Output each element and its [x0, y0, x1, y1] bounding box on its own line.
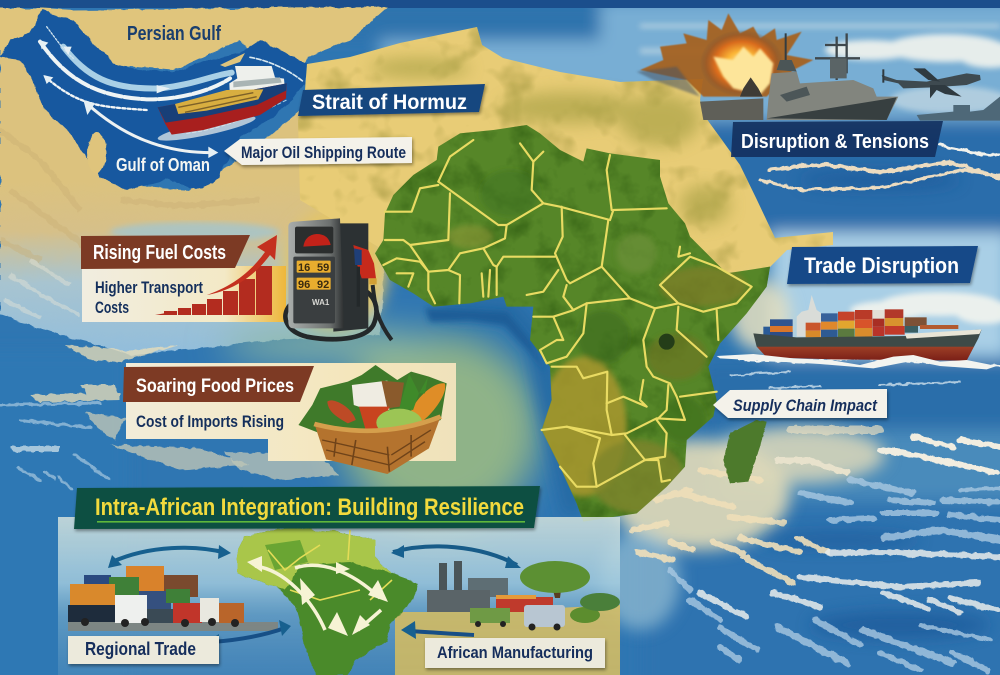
oil tanker: [156, 66, 287, 145]
mini africa map: [237, 525, 419, 675]
bow wave: [717, 354, 997, 369]
tanker deck cargo: [175, 89, 263, 114]
callout: supply chain impact: Supply Chain Impact: [733, 396, 878, 415]
callout: major oil shipping route: Major Oil Shipping Route: [241, 143, 406, 162]
container ship: [717, 295, 997, 369]
flow arrowheads: [247, 556, 388, 636]
pump display digits: 96: [298, 279, 310, 291]
tanker hull: [158, 83, 287, 135]
regional trade arrows: [108, 545, 521, 650]
pump display digits: 59: [317, 262, 329, 274]
persian gulf shipping routes: [39, 27, 303, 158]
trade flow arrows: [255, 565, 381, 630]
warship explosion and fleet: [637, 13, 1000, 121]
pump display digits: 16: [298, 262, 310, 274]
lake victoria: [659, 334, 675, 350]
route arrows: [39, 27, 303, 158]
madagascar: [723, 420, 767, 483]
icon: drone: [882, 68, 981, 98]
integration banner: Intra-African Integration: Building Resilience: [95, 494, 524, 521]
pale land and shallows west of Africa: [0, 305, 575, 525]
food heading: Soaring Food Prices: [136, 376, 294, 397]
factory and vehicles: [427, 561, 620, 630]
fuel header: [81, 235, 250, 269]
panel: intra-african integration: [58, 486, 620, 675]
country borders: [383, 140, 752, 487]
integration banner: [74, 486, 540, 529]
regional colour variation: [447, 170, 747, 513]
foam waves: [633, 145, 1000, 670]
olive patches on sand: [370, 58, 730, 225]
explosion: [637, 13, 813, 97]
food subtext: Cost of Imports Rising: [136, 412, 284, 431]
persian gulf water: [0, 10, 308, 190]
rising cost bar chart: [155, 266, 272, 315]
shipping containers and trucks: [68, 566, 244, 627]
ship hull: [753, 329, 982, 361]
rising arrow: [207, 235, 277, 295]
fuel subtext second line: Costs: [95, 298, 129, 317]
distant warship: [917, 97, 1000, 121]
label: gulf of oman: Gulf of Oman: [116, 155, 210, 175]
banner: disruption and tensions: [731, 121, 943, 157]
label: persian gulf: Persian Gulf: [127, 23, 221, 45]
africa landmass: [375, 125, 770, 522]
banner: trade disruption: [787, 246, 978, 284]
icon: fuel pump: [285, 218, 392, 340]
sand coast east of Africa: [600, 279, 885, 630]
sand land around the Persian Gulf: [0, 7, 420, 355]
sand land north-east of Africa: [298, 27, 833, 300]
food header: [123, 366, 314, 402]
integration ground: [395, 605, 620, 675]
callout: supply chain impact: [713, 389, 887, 418]
pump display digits: 92: [317, 279, 329, 291]
banner: strait of hormuz: Strait of Hormuz: [312, 91, 467, 114]
callout: major oil shipping route: [224, 137, 412, 165]
integration panel background: [58, 517, 620, 675]
fuel subtext: Higher Transport: [95, 278, 203, 297]
mid right waves: [777, 430, 1000, 473]
panel: rising fuel costs: [81, 235, 286, 322]
tanker superstructure: [229, 66, 285, 100]
banner: disruption and tensions: Disruption & Tensions: [741, 131, 929, 153]
icon: food basket: [298, 365, 447, 474]
main warship: [767, 33, 898, 120]
banner: trade disruption: Trade Disruption: [804, 253, 959, 278]
ship bridge: [797, 295, 822, 337]
label: african manufacturing: African Manufacturing: [437, 643, 593, 662]
trade yard ground: [68, 622, 278, 631]
pump display digits: [298, 262, 329, 291]
pump brand text: WA1: [312, 298, 330, 307]
lower right streaks: [633, 523, 827, 583]
label: regional trade: Regional Trade: [85, 639, 196, 659]
fuel heading: Rising Fuel Costs: [93, 242, 226, 264]
rear ship and domes: [700, 98, 763, 120]
panel: soaring food prices: [123, 363, 456, 461]
map of Africa: [375, 125, 770, 522]
upper right waves: [730, 145, 1000, 388]
label: african manufacturing: [425, 638, 605, 668]
banner: strait of hormuz: [298, 84, 485, 116]
label: regional trade: [68, 636, 219, 664]
containers: [763, 309, 958, 337]
